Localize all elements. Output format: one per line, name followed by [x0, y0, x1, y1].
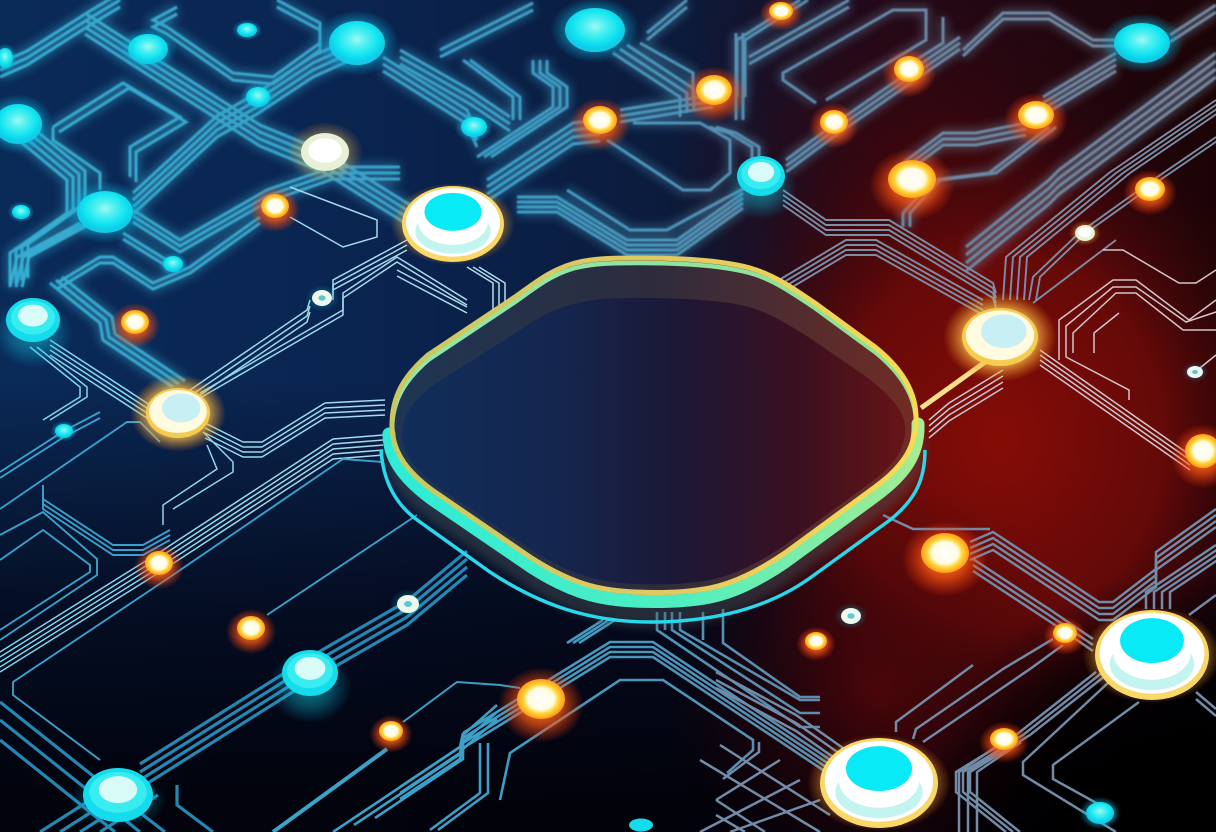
outer cyan line	[381, 450, 925, 622]
right circuit traces	[779, 100, 1216, 315]
ring ground shadow	[385, 290, 925, 628]
lower left circuit traces	[0, 551, 467, 832]
nodes: small white	[287, 122, 1209, 630]
nodes: teal with pale centre	[0, 156, 797, 829]
connector from ring to node	[921, 360, 988, 408]
nodes: yellow-ringed white	[130, 292, 1057, 452]
nodes: large cyan with yellow ring	[391, 183, 1216, 832]
ring inner floor	[402, 298, 905, 584]
ring floor step	[392, 258, 916, 592]
left circuit traces	[0, 412, 417, 760]
thin bright traces	[0, 187, 1216, 672]
yellow ring band	[392, 258, 916, 592]
central ring	[381, 258, 925, 628]
thin green inner band	[392, 263, 916, 598]
lower right circuit traces	[700, 509, 1216, 832]
trace haze	[0, 0, 1216, 387]
upper circuit traces	[0, 0, 1216, 387]
lower cyan-green rim	[389, 424, 918, 602]
lower circuit traces	[273, 609, 860, 832]
